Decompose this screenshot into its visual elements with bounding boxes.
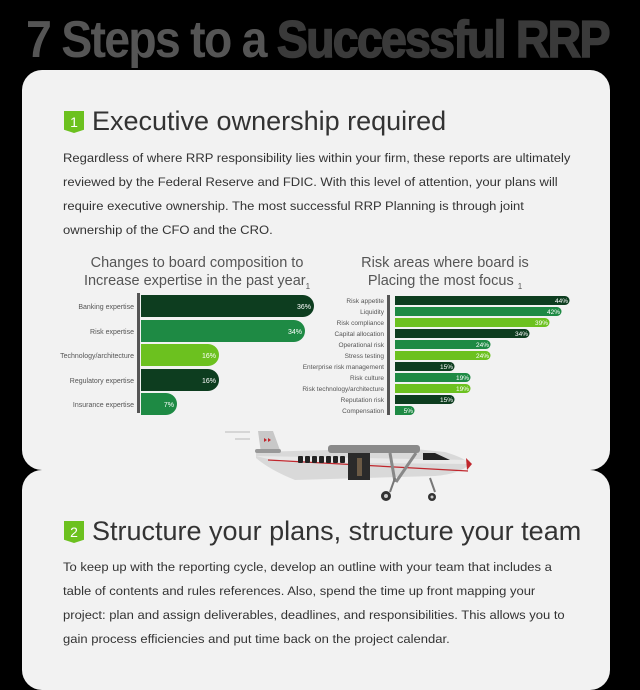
bar chart right: 24%: [476, 342, 489, 349]
bar chart left: 36%: [297, 304, 311, 311]
bar chart right: Capital allocation: [334, 331, 384, 338]
bar chart right: Compensation: [342, 408, 384, 415]
bar chart right: Reputation risk: [341, 397, 385, 404]
chart title right: Placing the most focus 1: [368, 273, 522, 291]
bar chart right: 34%: [515, 331, 528, 338]
panel: step 2: [22, 470, 610, 690]
bar chart left: 16%: [202, 353, 216, 360]
bar chart right: 5%: [404, 408, 413, 415]
illustration: plane: [225, 431, 472, 501]
bar chart right: 24%: [476, 353, 489, 360]
bar chart right: Risk appetite: [346, 298, 384, 305]
text: step 2: To keep up with the reporting cycle, develop an outline with your team that includes a table of contents and rules references. Also, spend the time up front mapping your project: plan and assign deliverables, deadlines, and responsibilities. This allows you to gain process efficiencies and put time back on the project calendar.: [63, 560, 565, 646]
bar chart left: Regulatory expertise: [70, 378, 134, 385]
bar chart right: 42%: [547, 309, 560, 316]
panel: step 1: [22, 70, 610, 470]
chart title left: [84, 255, 310, 291]
chart title right: Risk areas where board is: [361, 255, 529, 271]
bar chart right: 44%: [555, 298, 568, 305]
bar chart right: 15%: [440, 397, 453, 404]
chart title left: Increase expertise in the past year1: [84, 273, 310, 291]
bar chart right: Risk culture: [350, 375, 384, 382]
title: 7 Steps to a Successful RRP: [26, 11, 609, 69]
chart title right: [361, 255, 529, 291]
bar chart right: 39%: [535, 320, 548, 327]
bar chart left: Insurance expertise: [73, 402, 134, 409]
heading: step 1: Executive ownership required: [92, 106, 446, 136]
heading: step 1: 1: [70, 114, 78, 130]
bar chart right: Stress testing: [345, 353, 384, 360]
bar chart left: 7%: [164, 402, 174, 409]
bar chart right: 19%: [456, 386, 469, 393]
heading: step 2: Structure your plans, structure your team: [92, 516, 581, 546]
bar chart left: Banking expertise: [78, 304, 134, 311]
bar chart right: 19%: [456, 375, 469, 382]
bar chart right: 15%: [440, 364, 453, 371]
bar chart right: Enterprise risk management: [303, 364, 384, 371]
bar chart left: Risk expertise: [90, 329, 134, 336]
chart title left: Changes to board composition to: [91, 255, 303, 271]
bar chart left: 34%: [288, 329, 302, 336]
bar chart left: 16%: [202, 378, 216, 385]
bar chart right: Risk technology/architecture: [302, 386, 384, 393]
bar chart right: Operational risk: [338, 342, 385, 349]
text: step 1: Regardless of where RRP responsibility lies within your firm, these reports are ultimately reviewed by the Federal Reserve and FDIC. With this level of attention, your plans will require executive ownership. The most successful RRP Planning is through joint ownership of the CFO and the CRO.: [63, 151, 570, 237]
bar chart left: Technology/architecture: [60, 353, 134, 360]
bar chart right: Liquidity: [360, 309, 385, 316]
heading: step 2: 2: [70, 524, 78, 540]
bar chart right: Risk compliance: [337, 320, 384, 327]
